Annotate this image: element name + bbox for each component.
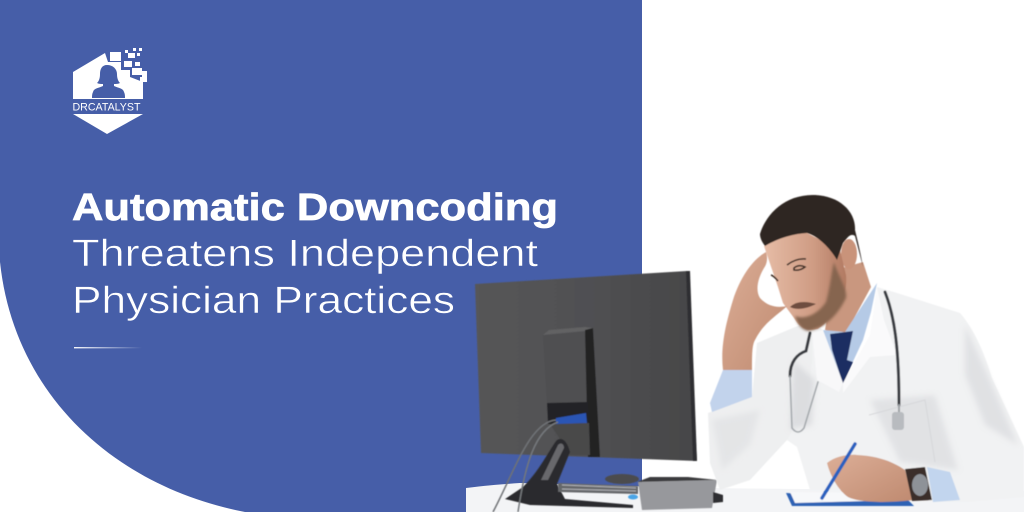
neck	[825, 262, 871, 335]
logo hexagon	[73, 53, 143, 99]
clipboard	[786, 493, 914, 506]
hair	[760, 195, 863, 267]
coat right lapel	[843, 287, 897, 393]
logo chevron	[73, 114, 143, 134]
blue background panel	[0, 0, 642, 512]
monitor back	[475, 271, 697, 461]
left shirt cuff	[710, 370, 752, 412]
wristwatch	[905, 467, 932, 501]
title	[72, 187, 558, 322]
keyboard and mouse	[558, 474, 639, 500]
coat body	[770, 287, 1024, 502]
doctor photo	[708, 195, 1024, 506]
ear	[841, 239, 857, 269]
computer monitor	[475, 271, 697, 512]
pen	[822, 444, 855, 498]
left hand on head	[722, 252, 787, 370]
eye and brow	[771, 259, 806, 281]
blue cable connector	[556, 413, 587, 424]
logo: DrCatalyst	[72, 48, 147, 134]
title line 3: Physician Practices	[72, 280, 455, 322]
stethoscope chest piece	[892, 412, 904, 430]
monitor mount plate	[543, 330, 588, 403]
mouth and moustache	[790, 302, 816, 309]
stethoscope	[790, 292, 899, 432]
divider rule	[74, 347, 142, 348]
coat left sleeve	[708, 320, 812, 490]
title line 1: Automatic Downcoding	[72, 187, 558, 229]
logo pixel squares	[110, 48, 147, 82]
coat left lapel	[812, 330, 843, 392]
blue shirt	[823, 283, 877, 383]
necktie	[830, 331, 853, 384]
mouse	[605, 474, 639, 484]
keyboard	[558, 483, 638, 494]
right hand	[827, 455, 913, 502]
logo doctor silhouette	[92, 65, 125, 98]
desk	[466, 483, 1024, 512]
face	[764, 233, 846, 330]
beard	[795, 262, 846, 331]
right shirt cuff	[927, 467, 960, 502]
logo wordmark: DRCATALYST	[72, 102, 141, 114]
title line 2: Threatens Independent	[72, 233, 539, 275]
monitor cables	[493, 420, 556, 512]
grey box device on desk	[637, 477, 723, 510]
coat shading	[870, 395, 958, 470]
coat pocket edge	[869, 400, 935, 462]
monitor stand	[550, 423, 590, 455]
